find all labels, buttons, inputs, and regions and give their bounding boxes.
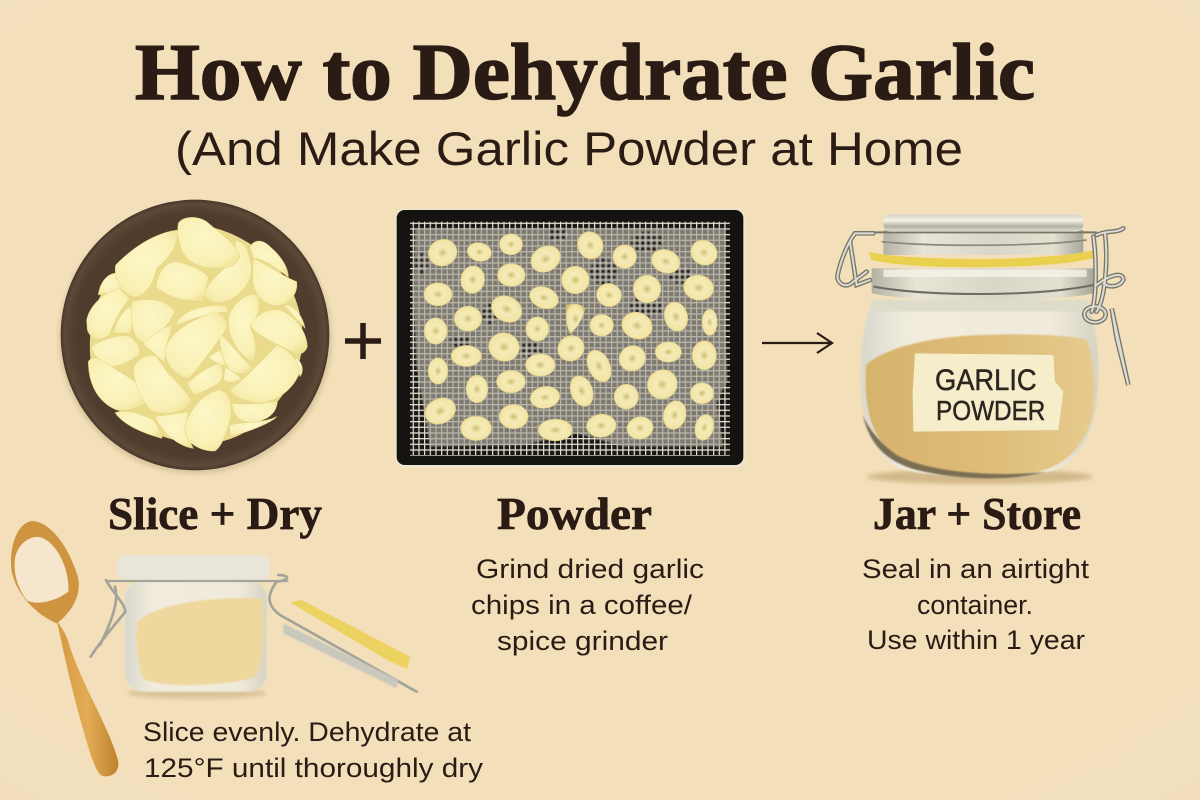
heading: Slice + Dry: Slice + Dry	[108, 489, 322, 539]
text: jar step: Use within 1 year	[867, 625, 1085, 655]
yellow seal band	[868, 250, 1095, 267]
small jar glass	[125, 580, 267, 692]
plus sign	[345, 323, 381, 359]
small jar powder	[136, 598, 263, 685]
heading: Jar + Store: Jar + Store	[873, 489, 1081, 539]
paper label: GARLIC	[935, 364, 1037, 397]
jar glass body	[861, 300, 1098, 477]
text: powder step: Grind dried garlic	[476, 554, 704, 584]
jar neck	[872, 268, 1093, 301]
text: slice step: 125°F until thoroughly dry	[144, 753, 484, 783]
paper label	[913, 353, 1063, 432]
arrow	[762, 333, 832, 353]
clasp wires	[837, 228, 1128, 385]
clasp wires	[91, 575, 417, 692]
image: wooden spoon with powder	[11, 521, 118, 776]
title: How to Dehydrate Garlic	[135, 29, 1035, 117]
text: jar step: Seal in an airtight	[862, 554, 1090, 584]
image: small open jar of powder	[91, 555, 417, 699]
heading: Powder: Powder	[497, 489, 652, 539]
subtitle: (And Make Garlic Powder at Home	[175, 122, 963, 175]
powder in spoon	[15, 537, 68, 603]
image: large jar of garlic powder	[837, 214, 1128, 484]
image: dehydrator tray with garlic chips	[395, 209, 745, 467]
text: jar step: container.	[917, 590, 1033, 620]
paper label: POWDER	[936, 395, 1045, 426]
jar lid	[883, 214, 1083, 232]
image: bowl of sliced garlic	[59, 200, 332, 474]
text: jar step	[862, 554, 1090, 655]
text: slice step	[143, 717, 484, 783]
small jar rim	[117, 555, 270, 580]
text: powder step: spice grinder	[497, 626, 668, 656]
text: slice step: Slice evenly. Dehydrate at	[143, 717, 472, 747]
text: powder step: chips in a coffee/	[471, 590, 693, 620]
powder fill	[866, 334, 1094, 475]
text: powder step	[471, 554, 704, 656]
detached lid	[283, 600, 410, 688]
